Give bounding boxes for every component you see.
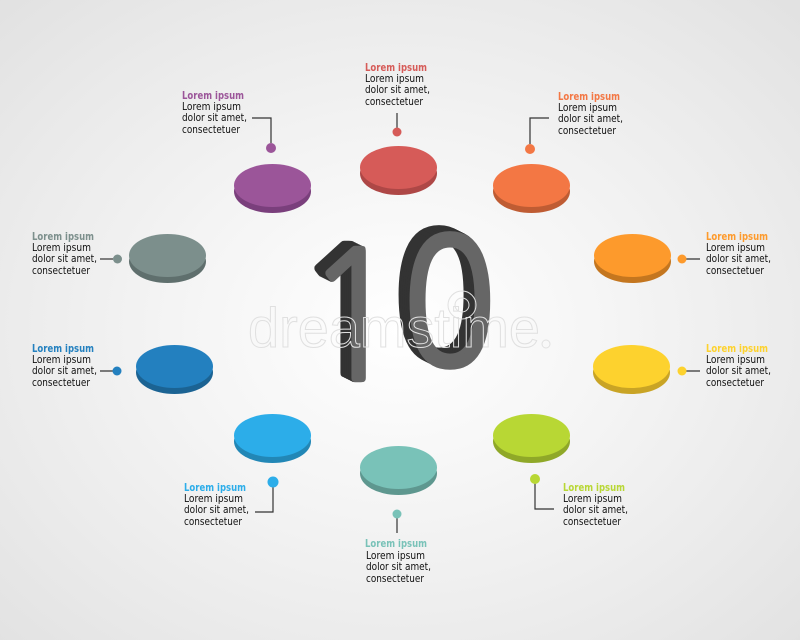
callout 5: lime: dolor sit amet,	[563, 504, 628, 516]
callout 1: red	[365, 62, 430, 136]
callout 5: lime: Lorem ipsum	[563, 493, 622, 505]
callout 8: blue	[32, 343, 122, 389]
disc 7: light blue	[234, 414, 311, 463]
callout 7: light blue	[184, 476, 278, 528]
callout 2: orange: Lorem ipsum	[558, 102, 617, 114]
callout 6: teal: consectetuer	[366, 573, 425, 585]
callout 5: lime: consectetuer	[563, 516, 622, 528]
callout 2: orange: consectetuer	[558, 125, 617, 137]
big number 10: 1	[292, 222, 392, 401]
callout 2: orange	[525, 91, 623, 154]
big number 10: 0	[393, 210, 488, 386]
callout 7: light blue: consectetuer	[184, 516, 243, 528]
big number 10: 0	[397, 212, 492, 388]
big number 10: 0	[395, 211, 490, 387]
big number 10: 1	[294, 223, 394, 402]
callout 3: amber: Lorem ipsum	[706, 242, 765, 254]
callout 6: teal: dolor sit amet,	[366, 561, 431, 573]
disc 6: teal	[360, 446, 437, 495]
big number 10: 0	[401, 214, 496, 390]
callout 7: light blue: Lorem ipsum	[184, 482, 246, 494]
callout 2: orange: Lorem ipsum	[558, 91, 620, 103]
big number 10	[292, 209, 497, 406]
callout 8: blue: Lorem ipsum	[32, 354, 91, 366]
callout 4: yellow: Lorem ipsum	[706, 354, 765, 366]
callout 1: red: Lorem ipsum	[365, 73, 424, 85]
callout 9: gray: dolor sit amet,	[32, 253, 97, 265]
callout 10: purple: consectetuer	[182, 124, 241, 136]
callout 4: yellow: consectetuer	[706, 377, 765, 389]
callout 6: teal	[365, 510, 431, 585]
callout 7: light blue: dolor sit amet,	[184, 504, 249, 516]
disc 8: blue	[136, 345, 213, 394]
callout 2: orange: dolor sit amet,	[558, 113, 623, 125]
callout 6: teal: Lorem ipsum	[365, 538, 427, 550]
callout 1: red: consectetuer	[365, 96, 424, 108]
callout 4: yellow	[678, 343, 771, 389]
big number 10: 1	[302, 227, 402, 406]
disc 4: yellow	[593, 345, 670, 394]
callout 3: amber	[678, 231, 771, 277]
disc 10: purple	[234, 164, 311, 213]
callout 8: blue: dolor sit amet,	[32, 365, 97, 377]
callout 6: teal: Lorem ipsum	[366, 550, 425, 562]
disc 1: red	[360, 146, 437, 195]
callout 10: purple: Lorem ipsum	[182, 90, 244, 102]
big number 10: 1	[298, 225, 398, 404]
disc 9: gray	[129, 234, 206, 283]
big number 10: 1	[296, 224, 396, 403]
big number 10: 0	[402, 215, 497, 391]
callout 10: purple: Lorem ipsum	[182, 101, 241, 113]
callout 10: purple: dolor sit amet,	[182, 112, 247, 124]
disc 3: amber	[594, 234, 671, 283]
big number 10: 0	[391, 209, 486, 385]
disc 2: orange	[493, 164, 570, 213]
callout 10: purple	[182, 90, 276, 153]
big number 10: 1	[303, 227, 403, 406]
callout 9: gray: Lorem ipsum	[32, 242, 91, 254]
callout 1: red: Lorem ipsum	[365, 62, 427, 74]
callout 9: gray: consectetuer	[32, 265, 91, 277]
callout 5: lime	[530, 474, 628, 528]
callout 8: blue: Lorem ipsum	[32, 343, 94, 355]
big number 10: 0	[399, 213, 494, 389]
callout 4: yellow: dolor sit amet,	[706, 365, 771, 377]
callout 4: yellow: Lorem ipsum	[706, 343, 768, 355]
watermark: dreamstime	[248, 296, 540, 359]
callout 3: amber: dolor sit amet,	[706, 253, 771, 265]
callout 8: blue: consectetuer	[32, 377, 91, 389]
callout 1: red: dolor sit amet,	[365, 84, 430, 96]
callout 3: amber: consectetuer	[706, 265, 765, 277]
callout 7: light blue: Lorem ipsum	[184, 493, 243, 505]
disc 5: lime	[493, 414, 570, 463]
callout 5: lime: Lorem ipsum	[563, 482, 625, 494]
callout 9: gray	[32, 231, 122, 277]
big number 10: 1	[300, 226, 400, 405]
callout 9: gray: Lorem ipsum	[32, 231, 94, 243]
callout 3: amber: Lorem ipsum	[706, 231, 768, 243]
